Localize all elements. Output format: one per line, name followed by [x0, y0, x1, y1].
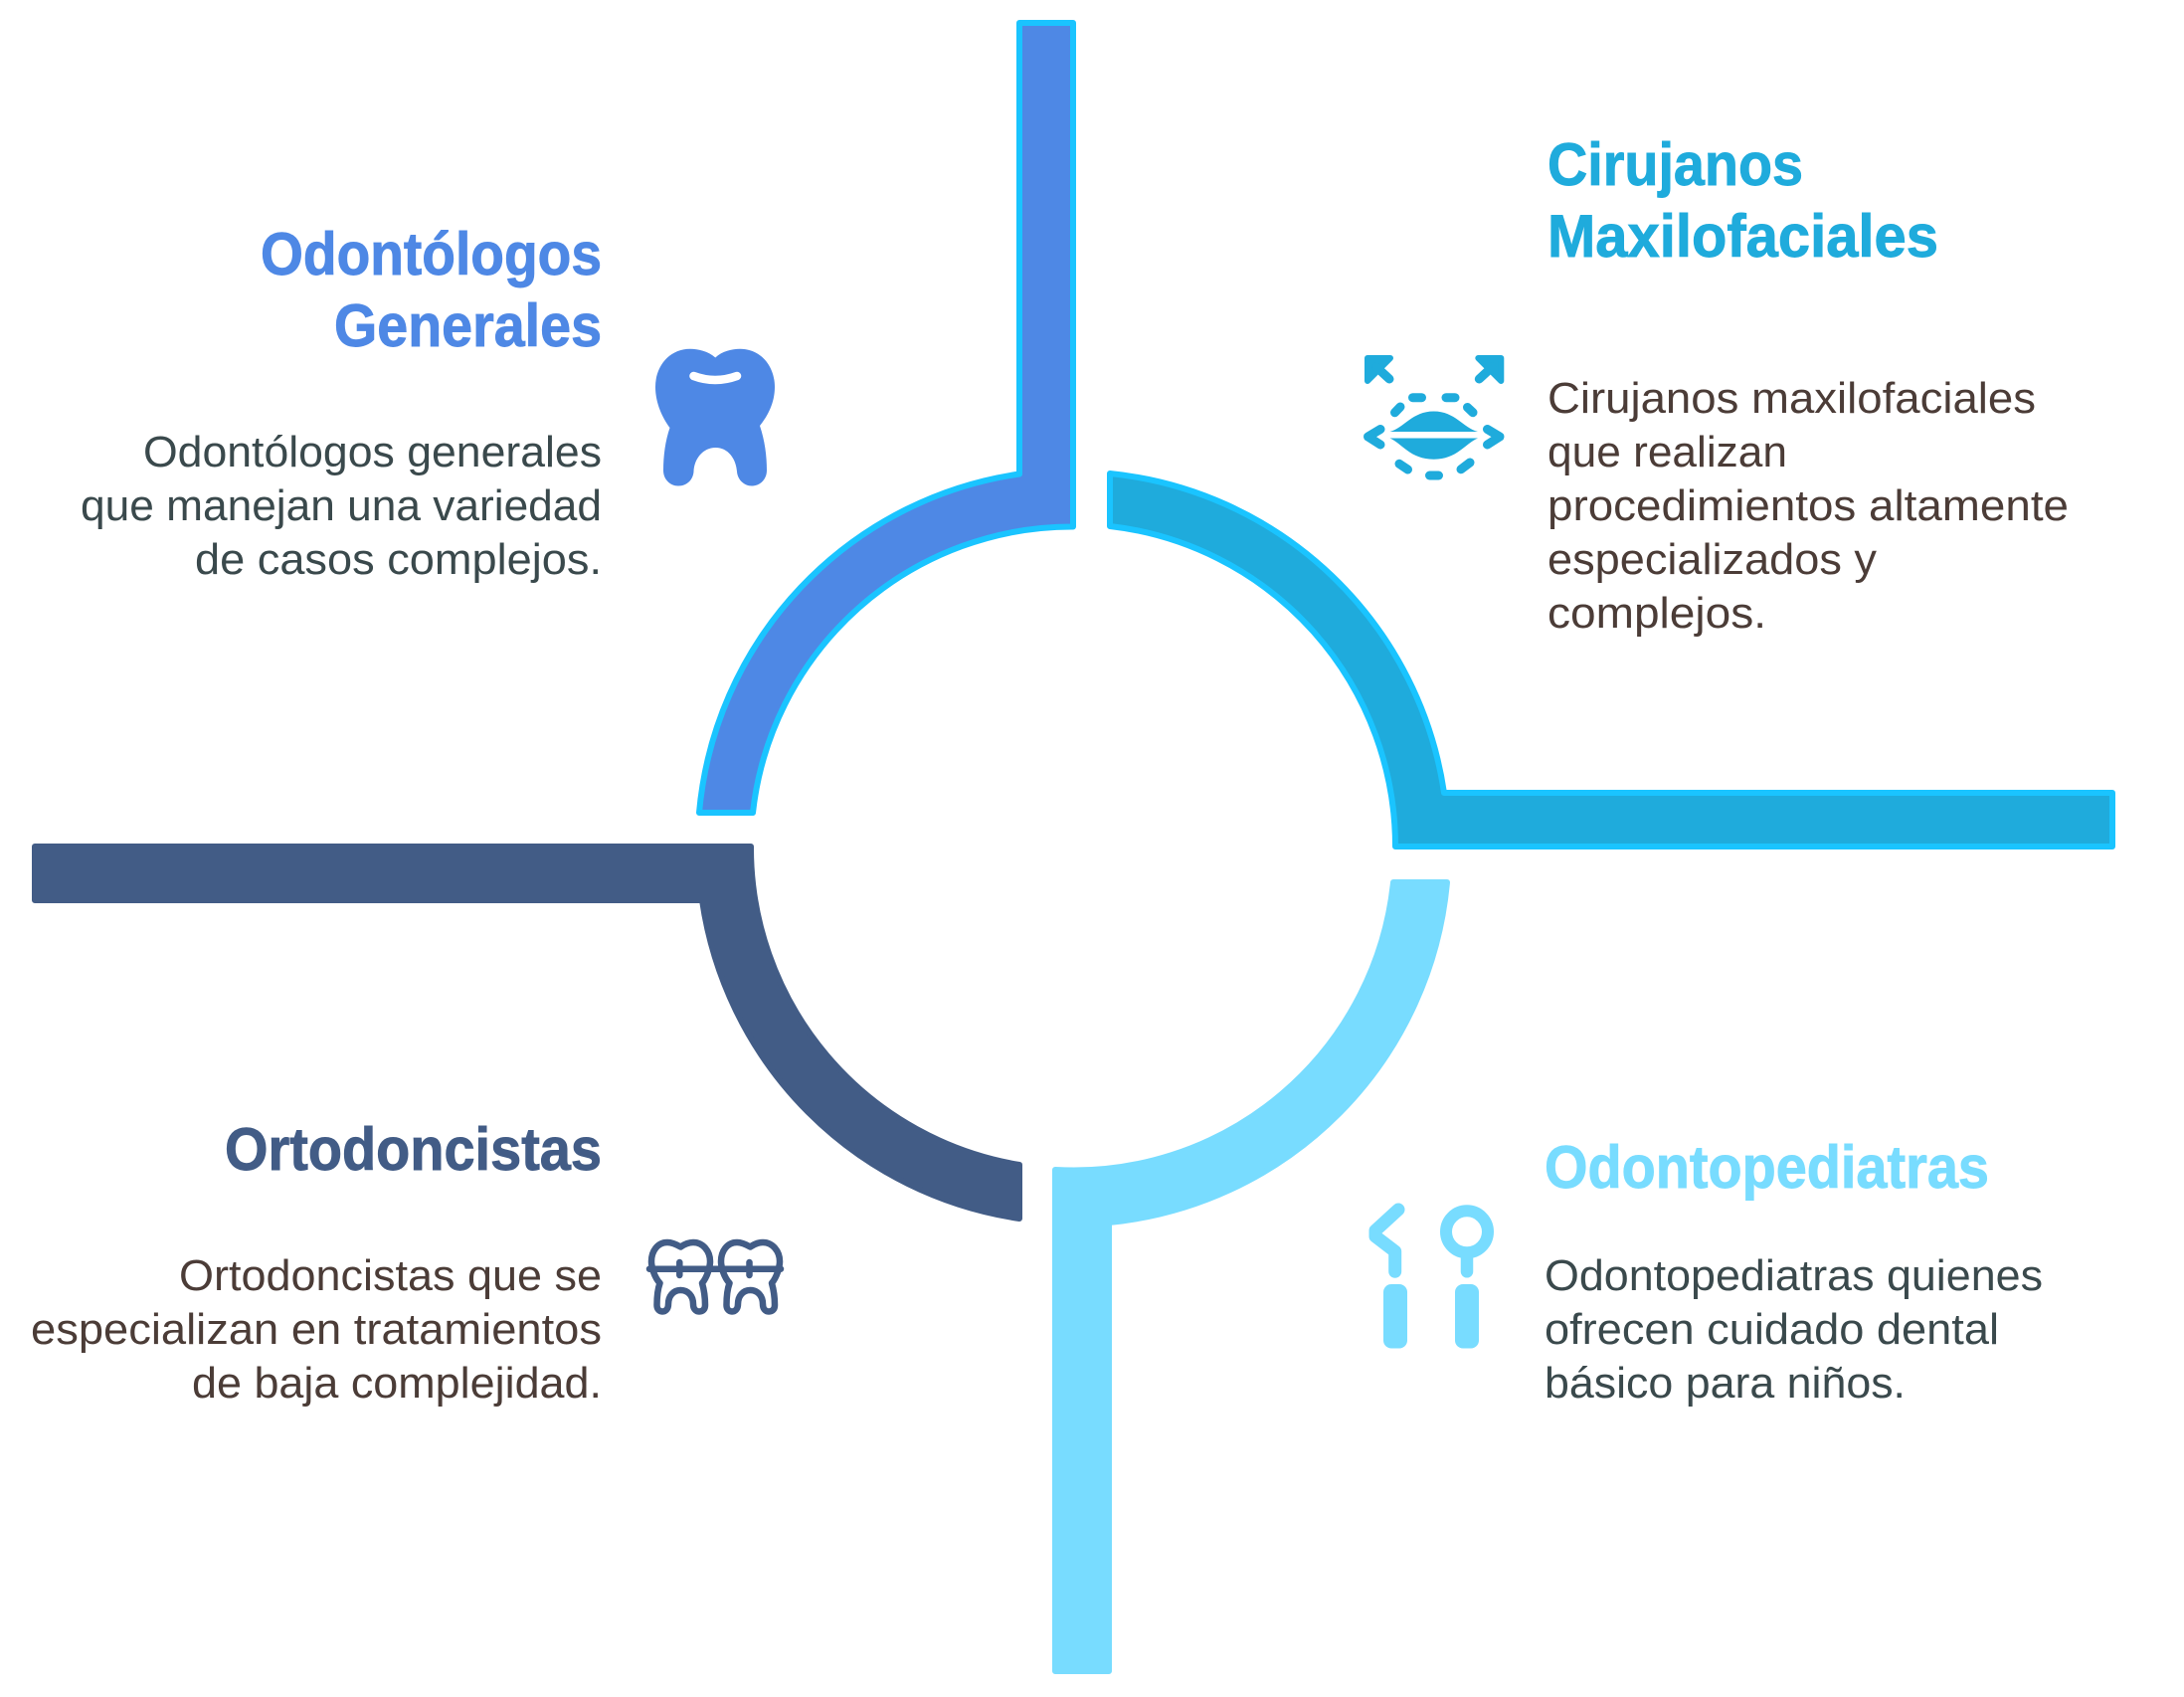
- heading: Ortodoncistas: Ortodoncistas: [225, 1116, 602, 1183]
- text block: Odontólogos description: de casos complejos.: [195, 535, 602, 584]
- text block: Ortodoncistas description: especializan en tratamientos: [31, 1305, 602, 1354]
- text block: Ortodoncistas description: Ortodoncistas que se: [179, 1251, 602, 1300]
- panel: Odontopediatras: [1545, 1134, 2043, 1408]
- text block: Odontólogos description: Odontólogos generales: [143, 428, 602, 476]
- text block: Cirujanos description: procedimientos altamente: [1547, 481, 2069, 530]
- icon: jaw with arrows: [1367, 358, 1501, 475]
- text block: Ortodoncistas description: [31, 1251, 602, 1408]
- text block: Cirujanos description: especializados y: [1547, 535, 1877, 584]
- segment: light blue arc and vertical bar: [1055, 882, 1447, 1671]
- text block: Cirujanos description: [1547, 374, 2069, 638]
- segment: blue arc and vertical bar: [699, 23, 1073, 813]
- heading: Odontólogos Generales: [261, 221, 602, 359]
- icon: tooth: [655, 349, 775, 485]
- text block: Odontopediatras description: ofrecen cuidado dental: [1545, 1305, 1999, 1354]
- segment: dark blue arc and horizontal bar: [35, 847, 1019, 1219]
- heading: Cirujanos Maxilofaciales: [1547, 131, 1938, 270]
- text block: Odontopediatras description: básico para niños.: [1545, 1359, 1906, 1408]
- heading: Odontólogos Generales: Generales: [334, 292, 602, 359]
- text block: Cirujanos description: que realizan: [1547, 428, 1787, 476]
- icon: teeth with braces: [649, 1242, 781, 1311]
- text block: Cirujanos description: complejos.: [1547, 589, 1766, 638]
- text block: Odontopediatras description: Odontopediatras quienes: [1545, 1251, 2043, 1300]
- heading: Odontólogos Generales: Odontólogos: [261, 221, 602, 287]
- text block: Cirujanos description: Cirujanos maxilofaciales: [1547, 374, 2036, 423]
- heading: Cirujanos Maxilofaciales: Maxilofaciales: [1547, 203, 1938, 270]
- text block: Odontólogos description: [81, 428, 602, 584]
- panel: Ortodoncistas: [31, 1116, 602, 1408]
- heading: Odontopediatras: Odontopediatras: [1545, 1134, 1989, 1201]
- heading: Cirujanos Maxilofaciales: Cirujanos: [1547, 131, 1803, 198]
- icon: dental instruments: [1375, 1210, 1488, 1349]
- text block: Odontopediatras description: [1545, 1251, 2043, 1408]
- panel: Cirujanos Maxilofaciales: [1547, 131, 2069, 638]
- panel: Odontólogos Generales: [81, 221, 602, 584]
- text block: Ortodoncistas description: de baja complejidad.: [192, 1359, 602, 1408]
- text block: Odontólogos description: que manejan una variedad: [81, 481, 602, 530]
- segment: teal arc and horizontal bar: [1110, 473, 2112, 847]
